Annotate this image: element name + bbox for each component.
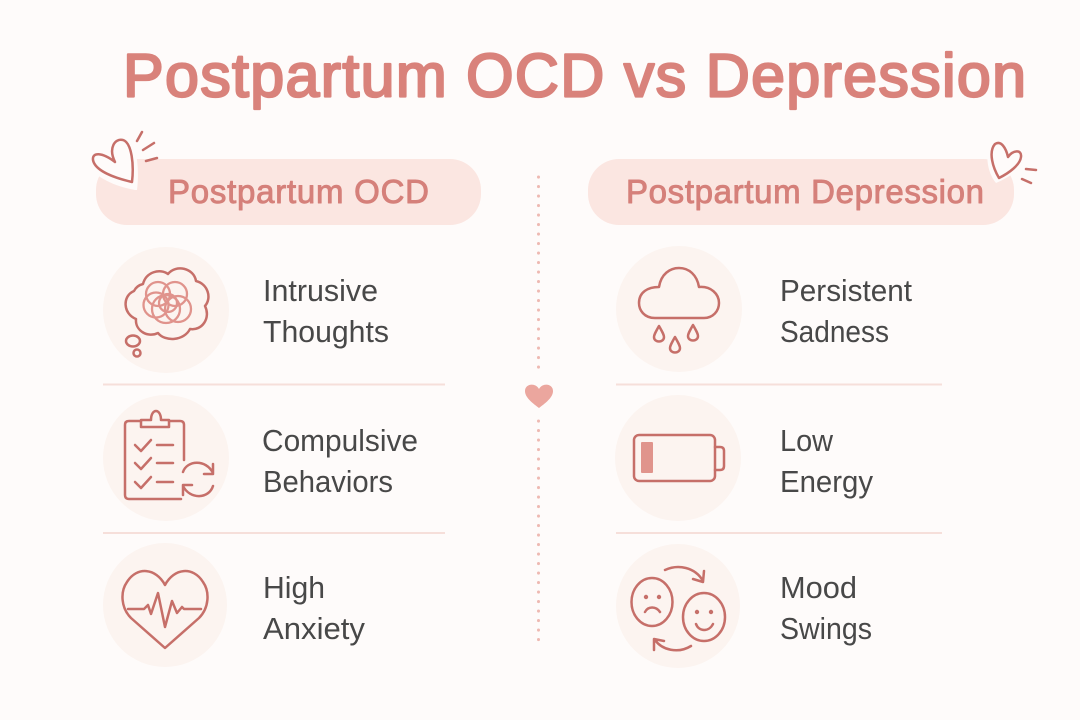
item: low energy	[615, 395, 873, 521]
label: Compulsive	[262, 423, 418, 458]
label: High	[263, 570, 325, 605]
title: Postpartum OCD vs Depression	[123, 42, 1026, 110]
label: Swings	[780, 611, 872, 646]
panel: postpartum depression	[588, 140, 1036, 668]
label	[263, 570, 365, 646]
item: intrusive thoughts	[103, 247, 389, 373]
item: compulsive behaviors	[103, 395, 418, 521]
label: Behaviors	[263, 464, 393, 499]
label: Mood	[780, 570, 857, 605]
label: Energy	[780, 464, 873, 499]
icon: hand-drawn heart left	[87, 132, 157, 190]
item: high anxiety	[103, 543, 365, 667]
label	[262, 423, 418, 499]
label	[780, 570, 872, 646]
icon: hand-drawn heart right	[987, 140, 1036, 183]
label	[263, 273, 389, 349]
item: persistent sadness	[616, 246, 912, 372]
label: Anxiety	[263, 611, 365, 646]
panel: postpartum OCD	[87, 132, 481, 667]
heading pill: postpartum depression	[588, 159, 1014, 225]
icon: thought cloud	[126, 268, 208, 356]
label: Thoughts	[263, 314, 389, 349]
label: Sadness	[780, 314, 889, 349]
item: mood swings	[616, 544, 872, 668]
icon: center heart	[525, 385, 553, 408]
label: Low	[780, 423, 834, 458]
heading pill: postpartum OCD	[96, 159, 481, 225]
icon: rain cloud	[639, 268, 719, 352]
label: Intrusive	[263, 273, 378, 308]
icon: clipboard with refresh	[125, 411, 213, 499]
heading pill: postpartum OCD: Postpartum OCD	[168, 173, 429, 210]
label: Persistent	[780, 273, 912, 308]
icon: sad and happy faces with arrows	[632, 567, 725, 650]
heading pill: postpartum depression: Postpartum Depression	[626, 173, 984, 210]
icon: low battery	[634, 435, 724, 481]
icon: heart with pulse	[122, 571, 208, 648]
label	[780, 423, 873, 499]
label	[780, 273, 912, 349]
